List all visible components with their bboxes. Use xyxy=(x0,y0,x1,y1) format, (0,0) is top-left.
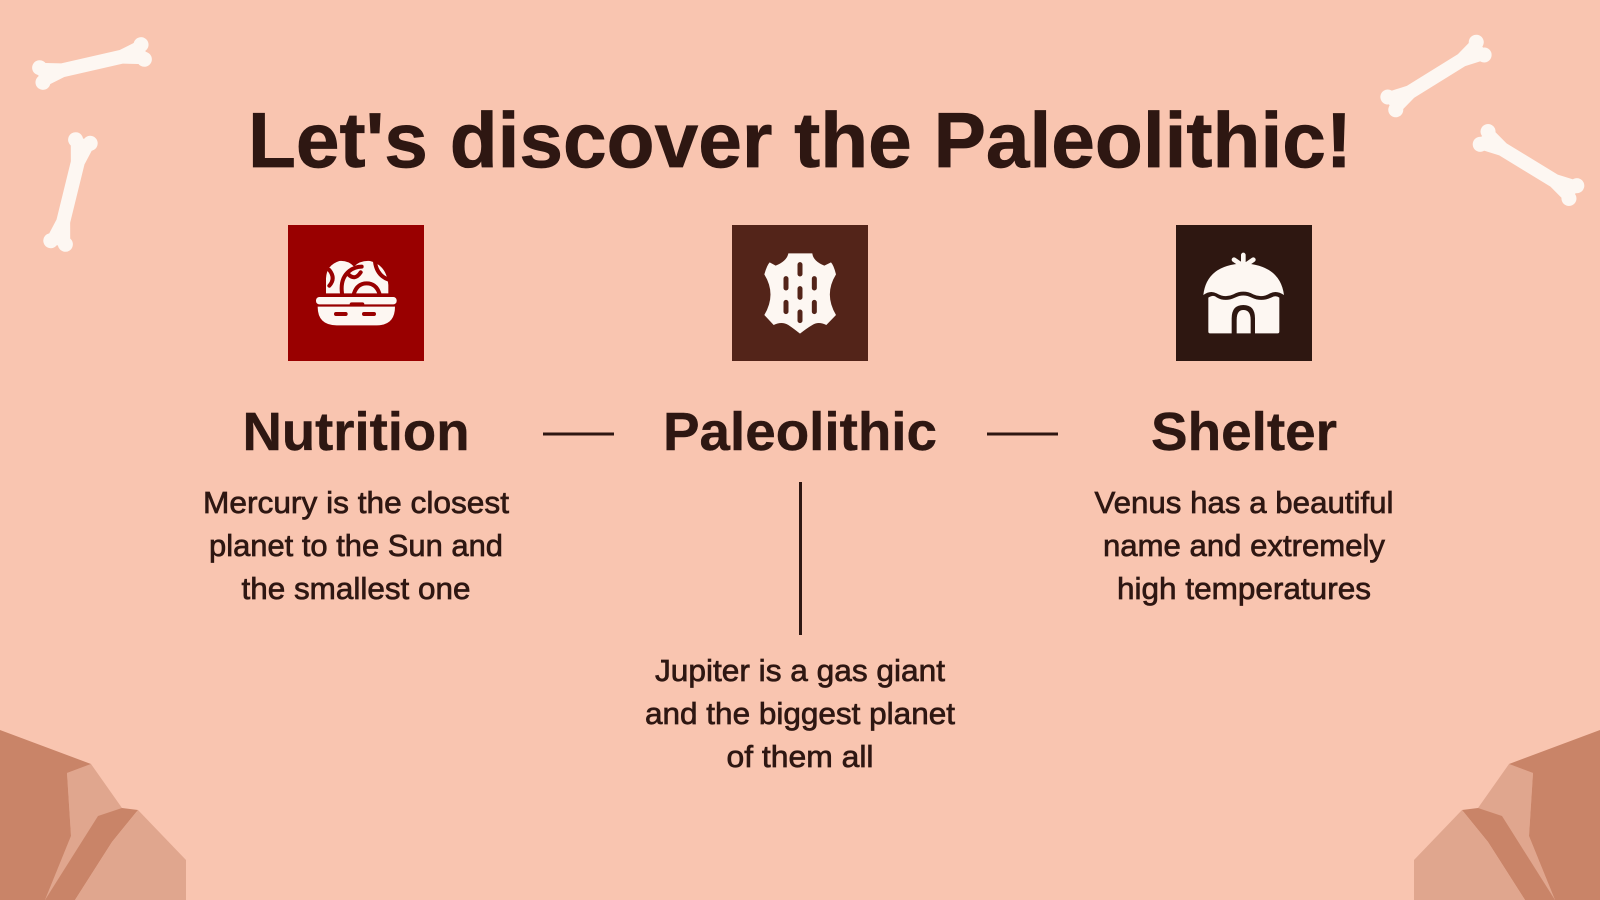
text: nutrition description: Mercury is the closest xyxy=(203,485,509,520)
text: paleolithic description: and the biggest planet xyxy=(645,696,955,731)
icon: bone top right 2 xyxy=(1470,121,1587,209)
icon: bone top right 1 xyxy=(1378,32,1494,120)
text: paleolithic description xyxy=(645,653,955,774)
rocks bottom left xyxy=(0,730,186,900)
text: nutrition description: planet to the Sun and xyxy=(209,528,503,563)
title: Let's discover the Paleolithic! xyxy=(248,96,1352,184)
rocks bottom right xyxy=(1414,730,1600,900)
text: shelter description: Venus has a beautiful xyxy=(1094,485,1394,520)
panel: paleolithic xyxy=(645,225,955,774)
text: shelter description: name and extremely xyxy=(1103,528,1385,563)
connector: nutrition to paleolithic xyxy=(543,432,614,436)
text: paleolithic description: of them all xyxy=(726,739,874,774)
icon: hut xyxy=(1176,225,1312,361)
connector: paleolithic to shelter xyxy=(987,432,1058,436)
icon: bone top left 2 xyxy=(42,131,99,253)
heading: shelter: Shelter xyxy=(1151,402,1337,462)
text: nutrition description: the smallest one xyxy=(242,571,470,606)
icon: animal hide xyxy=(732,225,868,361)
panel: nutrition xyxy=(203,225,509,606)
icon: bone top left 1 xyxy=(31,36,153,91)
text: nutrition description xyxy=(203,485,509,606)
text: paleolithic description: Jupiter is a gas giant xyxy=(655,653,945,688)
line: vertical connector xyxy=(799,482,802,635)
panel: shelter xyxy=(1094,225,1394,606)
text: shelter description: high temperatures xyxy=(1117,571,1371,606)
heading: paleolithic: Paleolithic xyxy=(663,402,937,462)
heading: nutrition: Nutrition xyxy=(242,402,470,462)
icon: food bowl xyxy=(288,225,424,361)
text: shelter description xyxy=(1094,485,1394,606)
